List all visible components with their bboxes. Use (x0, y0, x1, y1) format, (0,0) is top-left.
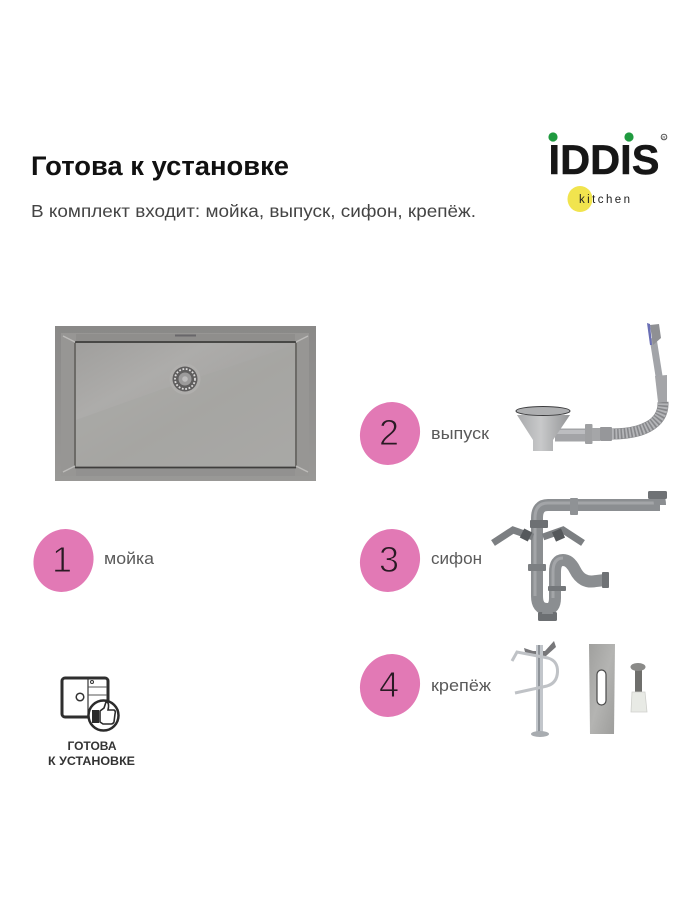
logo: iddis kitchen (548, 132, 667, 212)
title: Готова к установке (31, 151, 289, 181)
badge 4: 4 (379, 664, 399, 705)
label: крепёж: крепёж (431, 676, 492, 695)
label: мойка: мойка (104, 549, 155, 568)
subtitle: В комплект входит: мойка, выпуск, сифон, крепёж. (31, 201, 476, 221)
badge 3: 3 (379, 539, 399, 580)
siphon side branches (493, 530, 583, 543)
label: выпуск: выпуск (431, 424, 490, 443)
badge 2: 2 (379, 412, 399, 453)
drain (170, 364, 200, 394)
badge 3 (349, 518, 431, 603)
icon caption (48, 739, 135, 768)
badge 4 (349, 643, 431, 728)
icon caption: ГОТОВА (67, 739, 117, 753)
icon caption: К УСТАНОВКЕ (48, 754, 135, 768)
badge 1: 1 (52, 539, 72, 580)
mounting plate (589, 644, 615, 734)
logo: iddis kitchen: kitchen (579, 194, 630, 206)
badge 1 (22, 518, 105, 603)
drain assembly photo (516, 323, 667, 451)
badge 2 (349, 391, 431, 476)
icon: ready to install (48, 678, 135, 768)
siphon photo (493, 491, 667, 621)
logo: iddis kitchen: IDDIS (548, 136, 660, 183)
label: сифон: сифон (431, 549, 482, 568)
fasteners photo (512, 641, 647, 737)
sink photo (55, 326, 316, 481)
screw (630, 663, 647, 712)
logo: iddis kitchen: R (662, 135, 666, 140)
